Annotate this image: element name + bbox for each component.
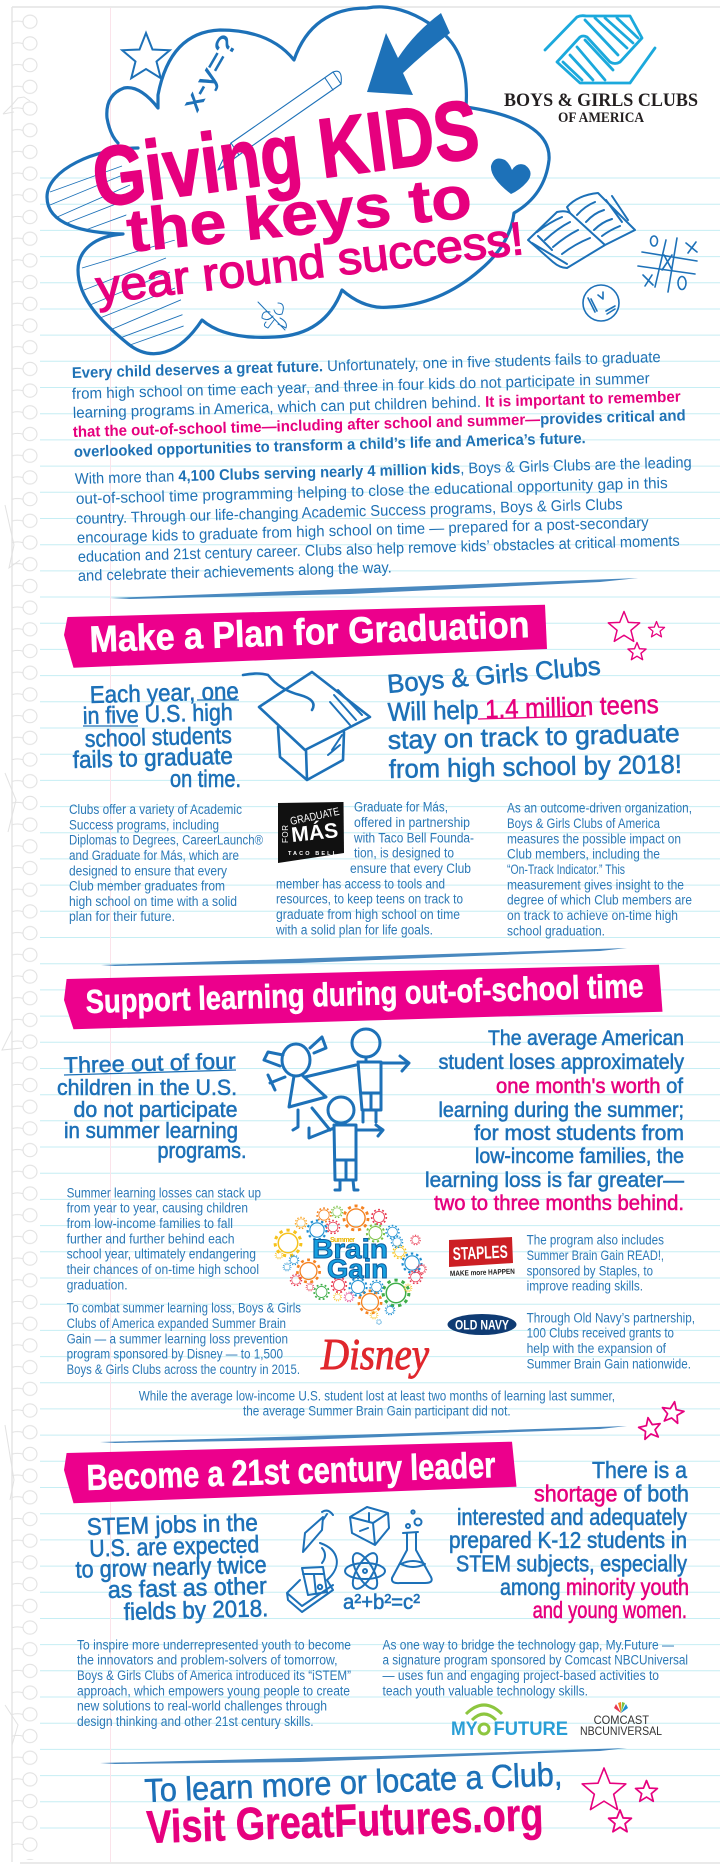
- footer call to action: To learn more or locate a Club,: [144, 1755, 563, 1809]
- callout: shortage: STEM subjects, especially: [456, 1551, 687, 1577]
- text block: summer learning losses: [67, 1185, 261, 1292]
- callout: three out of four: Three out of four: [63, 1048, 237, 1078]
- logo: Comcast NBCUniversal: [580, 1702, 662, 1738]
- text block: summer learning losses: school year, ultimately endangering: [67, 1247, 256, 1262]
- logo: Graduate for Más: [278, 802, 344, 863]
- footer call to action: [144, 1755, 563, 1853]
- callout: one in five: in five U.S. high: [82, 699, 233, 730]
- callout: shortage: shortage of both: [534, 1481, 689, 1507]
- text block: My.Future: [382, 1637, 688, 1698]
- logo: Summer Brain Gain: [275, 1206, 426, 1325]
- text block: summer learning losses: further and further behind each: [67, 1231, 235, 1246]
- text block: staples: [527, 1233, 664, 1294]
- callout: 1.4 million teens: stay on track to graduate: [387, 718, 680, 755]
- text block: iSTEM: To inspire more underrepresented youth to become: [77, 1637, 351, 1652]
- text block: combat summer learning loss: [67, 1301, 301, 1377]
- intro text block: that the out-of-school time—including after school and summer—provides critical and: [73, 407, 686, 441]
- icon: tic tac toe: [638, 236, 697, 292]
- text block: combat summer learning loss: program sponsored by Disney — to 1,500: [67, 1347, 283, 1362]
- text column 2: tion, is designed to: [354, 846, 454, 861]
- callout: one month's worth: learning during the summer;: [438, 1098, 684, 1122]
- intro text block: education and 21st century career. Clubs also help remove kids’ obstacles at critical moments: [78, 533, 680, 566]
- text block: combat summer learning loss: Clubs of America expanded Summer Brain: [67, 1316, 286, 1331]
- text block: old navy: Through Old Navy’s partnership,: [527, 1310, 695, 1325]
- text column 3: As an outcome-driven organization,: [507, 801, 692, 816]
- logo: Staples: [449, 1237, 515, 1278]
- callout: one month's worth: one month's worth of: [496, 1074, 683, 1098]
- section banner: [64, 605, 547, 668]
- text column 1: designed to ensure that every: [69, 863, 227, 878]
- icon: clock: [583, 285, 619, 321]
- callout: STEM jobs: fields by 2018.: [123, 1595, 269, 1626]
- logo: Summer Brain Gain: Summer: [330, 1237, 355, 1244]
- callout: one month's worth: learning loss is far greater—: [425, 1168, 684, 1192]
- callout: 1.4 million teens: Will help 1.4 million teens: [387, 689, 659, 727]
- icon: stars: [608, 612, 665, 660]
- logo: Old Navy: [448, 1314, 516, 1335]
- icon: three children: [264, 1029, 409, 1190]
- logo: My Future: [451, 1705, 568, 1740]
- logo: Summer Brain Gain: Brain: [312, 1234, 388, 1264]
- text column 2: [275, 800, 474, 937]
- text block: staples: Summer Brain Gain READ!,: [527, 1248, 664, 1263]
- callout: one in five: fails to graduate: [72, 743, 233, 774]
- callout: one in five: on time.: [170, 766, 241, 793]
- brush stroke divider: [110, 578, 638, 599]
- text block: My.Future: — uses fun and engaging project-based activities to: [382, 1668, 659, 1683]
- footer call to action: Visit GreatFutures.org: [146, 1788, 544, 1853]
- text block: iSTEM: approach, which empowers young people to create: [77, 1683, 350, 1698]
- callout: three out of four: programs.: [158, 1138, 246, 1163]
- text column 1: Clubs offer a variety of Academic: [69, 802, 242, 817]
- intro text block: With more than 4,100 Clubs serving nearly 4 million kids, Boys & Girls Clubs are the leading: [75, 454, 692, 488]
- text block: iSTEM: [77, 1637, 351, 1729]
- title: the keys to: [124, 163, 475, 265]
- icon: open book: [528, 193, 635, 268]
- section banner: [64, 1442, 516, 1503]
- text block: old navy: 100 Clubs received grants to: [527, 1326, 674, 1341]
- text column 2: ensure that every Club: [350, 861, 471, 876]
- logo: Graduate for Más: FOR: [281, 825, 290, 843]
- logo: Graduate for Más: TACO BELL: [288, 851, 337, 857]
- icon: science doodles: [287, 1507, 432, 1612]
- intro text block: country. Through our life-changing Academic Success programs, Boys & Girls Clubs: [76, 496, 623, 528]
- intro text block: Every child deserves a great future. Unfortunately, one in five students fails to graduate: [72, 349, 661, 382]
- callout: STEM jobs: U.S. are expected: [89, 1531, 260, 1563]
- closing note: While the average low-income U.S. student lost at least two months of learning last summer,: [139, 1389, 615, 1404]
- callout: three out of four: children in the U.S.: [57, 1075, 237, 1100]
- intro text block: from high school on time each year, and three in four kids do not participate in summer: [72, 370, 650, 403]
- text column 2: with a solid plan for life goals.: [275, 922, 433, 937]
- text block: staples: sponsored by Staples, to: [527, 1263, 653, 1278]
- text block: old navy: Summer Brain Gain nationwide.: [527, 1356, 691, 1371]
- text block: staples: The program also includes: [527, 1233, 664, 1248]
- callout: one month's worth: student loses approximately: [438, 1050, 684, 1074]
- intro text block: encourage kids to graduate from high school on time — prepared for a post-secondary: [77, 515, 649, 547]
- text block: summer learning losses: their chances of on-time high school: [67, 1262, 259, 1277]
- title: Giving KIDS: [87, 82, 484, 225]
- callout: one month's worth: The average American: [488, 1026, 684, 1050]
- doodle equation: a²+b²=c²: [343, 1591, 420, 1614]
- panel: support learning during out-of-school time: [57, 965, 695, 1440]
- icon: stars: [637, 1400, 685, 1440]
- text block: My.Future: As one way to bridge the technology gap, My.Future —: [382, 1637, 674, 1652]
- text column 3: Club members, including the: [507, 847, 660, 862]
- text column 3: measures the possible impact on: [507, 831, 681, 846]
- callout: one in five: school students: [84, 722, 232, 753]
- callout: three out of four: [57, 1048, 246, 1163]
- text column 3: Boys & Girls Clubs of America: [507, 816, 660, 831]
- text block: summer learning losses: graduation.: [67, 1277, 128, 1292]
- text column 3: on track to achieve on-time high: [507, 908, 678, 923]
- callout: 1.4 million teens: from high school by 2018!: [389, 749, 682, 784]
- text block: iSTEM: new solutions to real-world challenges through: [77, 1699, 327, 1714]
- title: [87, 82, 526, 313]
- text column 3: school graduation.: [507, 923, 605, 938]
- doodle equation: x-y=?: [176, 30, 243, 116]
- brush stroke divider: [100, 1426, 627, 1443]
- callout: shortage: There is a: [592, 1457, 687, 1483]
- logo: Boys & Girls Clubs of America: [504, 16, 698, 126]
- text column 2: resources, to keep teens on track to: [276, 892, 463, 907]
- logo: Graduate for Más: GRADUATE: [289, 806, 341, 828]
- text column 1: plan for their future.: [69, 909, 175, 924]
- icon: pencil: [218, 71, 341, 170]
- text column 1: Club member graduates from: [69, 879, 225, 894]
- callout: one month's worth: for most students from: [474, 1121, 684, 1145]
- callout: one month's worth: [425, 1026, 684, 1215]
- callout: one month's worth: two to three months behind.: [434, 1191, 684, 1215]
- callout: shortage: [449, 1457, 689, 1623]
- logo: Boys & Girls Clubs of America: BOYS & GIRLS CLUBS: [504, 90, 698, 111]
- text column 2: with Taco Bell Founda-: [353, 830, 474, 845]
- section banner: [64, 965, 662, 1029]
- icon: graduation cap: [243, 672, 370, 780]
- text column 1: Diplomas to Degrees, CareerLaunch®: [69, 833, 263, 848]
- text column 2: member has access to tools and: [276, 876, 445, 891]
- logo: My Future: FUTURE: [494, 1719, 568, 1740]
- logo: Staples: MAKE more HAPPEN: [450, 1267, 515, 1278]
- intro text block: overlooked opportunities to transform a child’s life and America’s future.: [74, 430, 586, 461]
- text column 3: “On-Track Indicator.” This: [507, 862, 625, 877]
- callout: one in five: [72, 678, 241, 793]
- logo: My Future: MY: [451, 1719, 478, 1740]
- logo: Comcast NBCUniversal: COMCAST: [594, 1713, 650, 1727]
- text block: staples: improve reading skills.: [527, 1279, 643, 1294]
- text column 3: degree of which Club members are: [507, 893, 692, 908]
- text block: combat summer learning loss: Gain — a summer learning loss prevention: [67, 1331, 288, 1346]
- text column 3: measurement gives insight to the: [507, 877, 684, 892]
- text block: My.Future: teach youth valuable technology skills.: [382, 1683, 588, 1698]
- brush stroke divider: [101, 948, 627, 966]
- text block: iSTEM: design thinking and other 21st century skills.: [77, 1714, 314, 1729]
- logo: Boys & Girls Clubs of America: OF AMERICA: [558, 110, 644, 126]
- brush stroke divider: [100, 1748, 627, 1764]
- icon: star doodle: [122, 33, 170, 78]
- callout: shortage: among minority youth: [500, 1574, 689, 1600]
- text column 3: [507, 801, 692, 938]
- text block: combat summer learning loss: Boys & Girls Clubs across the country in 2015.: [67, 1362, 300, 1377]
- text block: combat summer learning loss: To combat summer learning loss, Boys & Girls: [67, 1301, 301, 1316]
- section heading: Become a 21st century leader: [86, 1444, 496, 1498]
- text block: iSTEM: Boys & Girls Clubs of America introduced its “iSTEM”: [77, 1668, 351, 1683]
- text column 2: offered in partnership: [354, 815, 470, 830]
- callout: STEM jobs: [75, 1510, 269, 1626]
- text column 1: Success programs, including: [69, 817, 219, 832]
- text column 1: [69, 802, 263, 924]
- callout: 1.4 million teens: Boys & Girls Clubs: [386, 650, 602, 699]
- callout: shortage: prepared K-12 students in: [449, 1527, 687, 1553]
- text column 1: and Graduate for Más, which are: [69, 848, 239, 863]
- callout: three out of four: do not participate: [74, 1097, 238, 1122]
- text block: old navy: [527, 1310, 695, 1371]
- section heading: Make a Plan for Graduation: [89, 604, 530, 660]
- callout: STEM jobs: as fast as other: [107, 1573, 267, 1604]
- logo: Staples: STAPLES: [452, 1242, 508, 1264]
- logo: Comcast NBCUniversal: NBCUNIVERSAL: [580, 1724, 662, 1738]
- text block: summer learning losses: from year to year, causing children: [67, 1201, 248, 1216]
- title: year round success!: [93, 212, 526, 313]
- callout: shortage: interested and adequately: [457, 1504, 687, 1530]
- text block: summer learning losses: Summer learning losses can stack up: [67, 1185, 261, 1200]
- text block: old navy: help with the expansion of: [527, 1341, 666, 1356]
- callout: three out of four: in summer learning: [64, 1118, 238, 1143]
- logo: Disney: Disney: [320, 1330, 429, 1379]
- thought cloud outline: [47, 7, 549, 354]
- icon: dragonfly: [258, 302, 286, 330]
- text block: iSTEM: the innovators and problem-solvers of tomorrow,: [77, 1653, 338, 1668]
- logo: Summer Brain Gain: Gain: [327, 1254, 388, 1284]
- callout: STEM jobs: to grow nearly twice: [75, 1552, 267, 1584]
- panel: become a 21st century leader: [64, 1442, 689, 1740]
- intro text block: and celebrate their achievements along the way.: [78, 560, 392, 585]
- text block: summer learning losses: from low-income families to fall: [67, 1216, 233, 1231]
- panel: make a plan for graduation: [64, 604, 692, 938]
- icon: footer stars: [582, 1768, 657, 1832]
- callout: one in five: Each year, one: [89, 678, 239, 709]
- intro text block: [72, 349, 692, 585]
- text column 2: graduate from high school on time: [276, 907, 460, 922]
- closing note: [139, 1389, 615, 1419]
- callout: STEM jobs: STEM jobs in the: [86, 1510, 258, 1541]
- callout: 1.4 million teens: [386, 650, 682, 784]
- logo: Old Navy: OLD NAVY: [455, 1318, 509, 1332]
- icon: big arrow: [367, 13, 450, 95]
- callout: one month's worth: low-income families, the: [475, 1144, 684, 1168]
- icon: heart: [491, 158, 531, 194]
- intro text block: out-of-school time programming helping to close the educational opportunity gap in this: [76, 475, 668, 508]
- logo: Graduate for Más: MÁS: [290, 819, 339, 847]
- intro text block: learning programs in America, which can put children behind. It is important to remember: [73, 389, 681, 422]
- closing note: the average Summer Brain Gain participant did not.: [243, 1404, 511, 1419]
- text column 1: high school on time with a solid: [69, 894, 237, 909]
- text column 2: Graduate for Más,: [354, 800, 448, 815]
